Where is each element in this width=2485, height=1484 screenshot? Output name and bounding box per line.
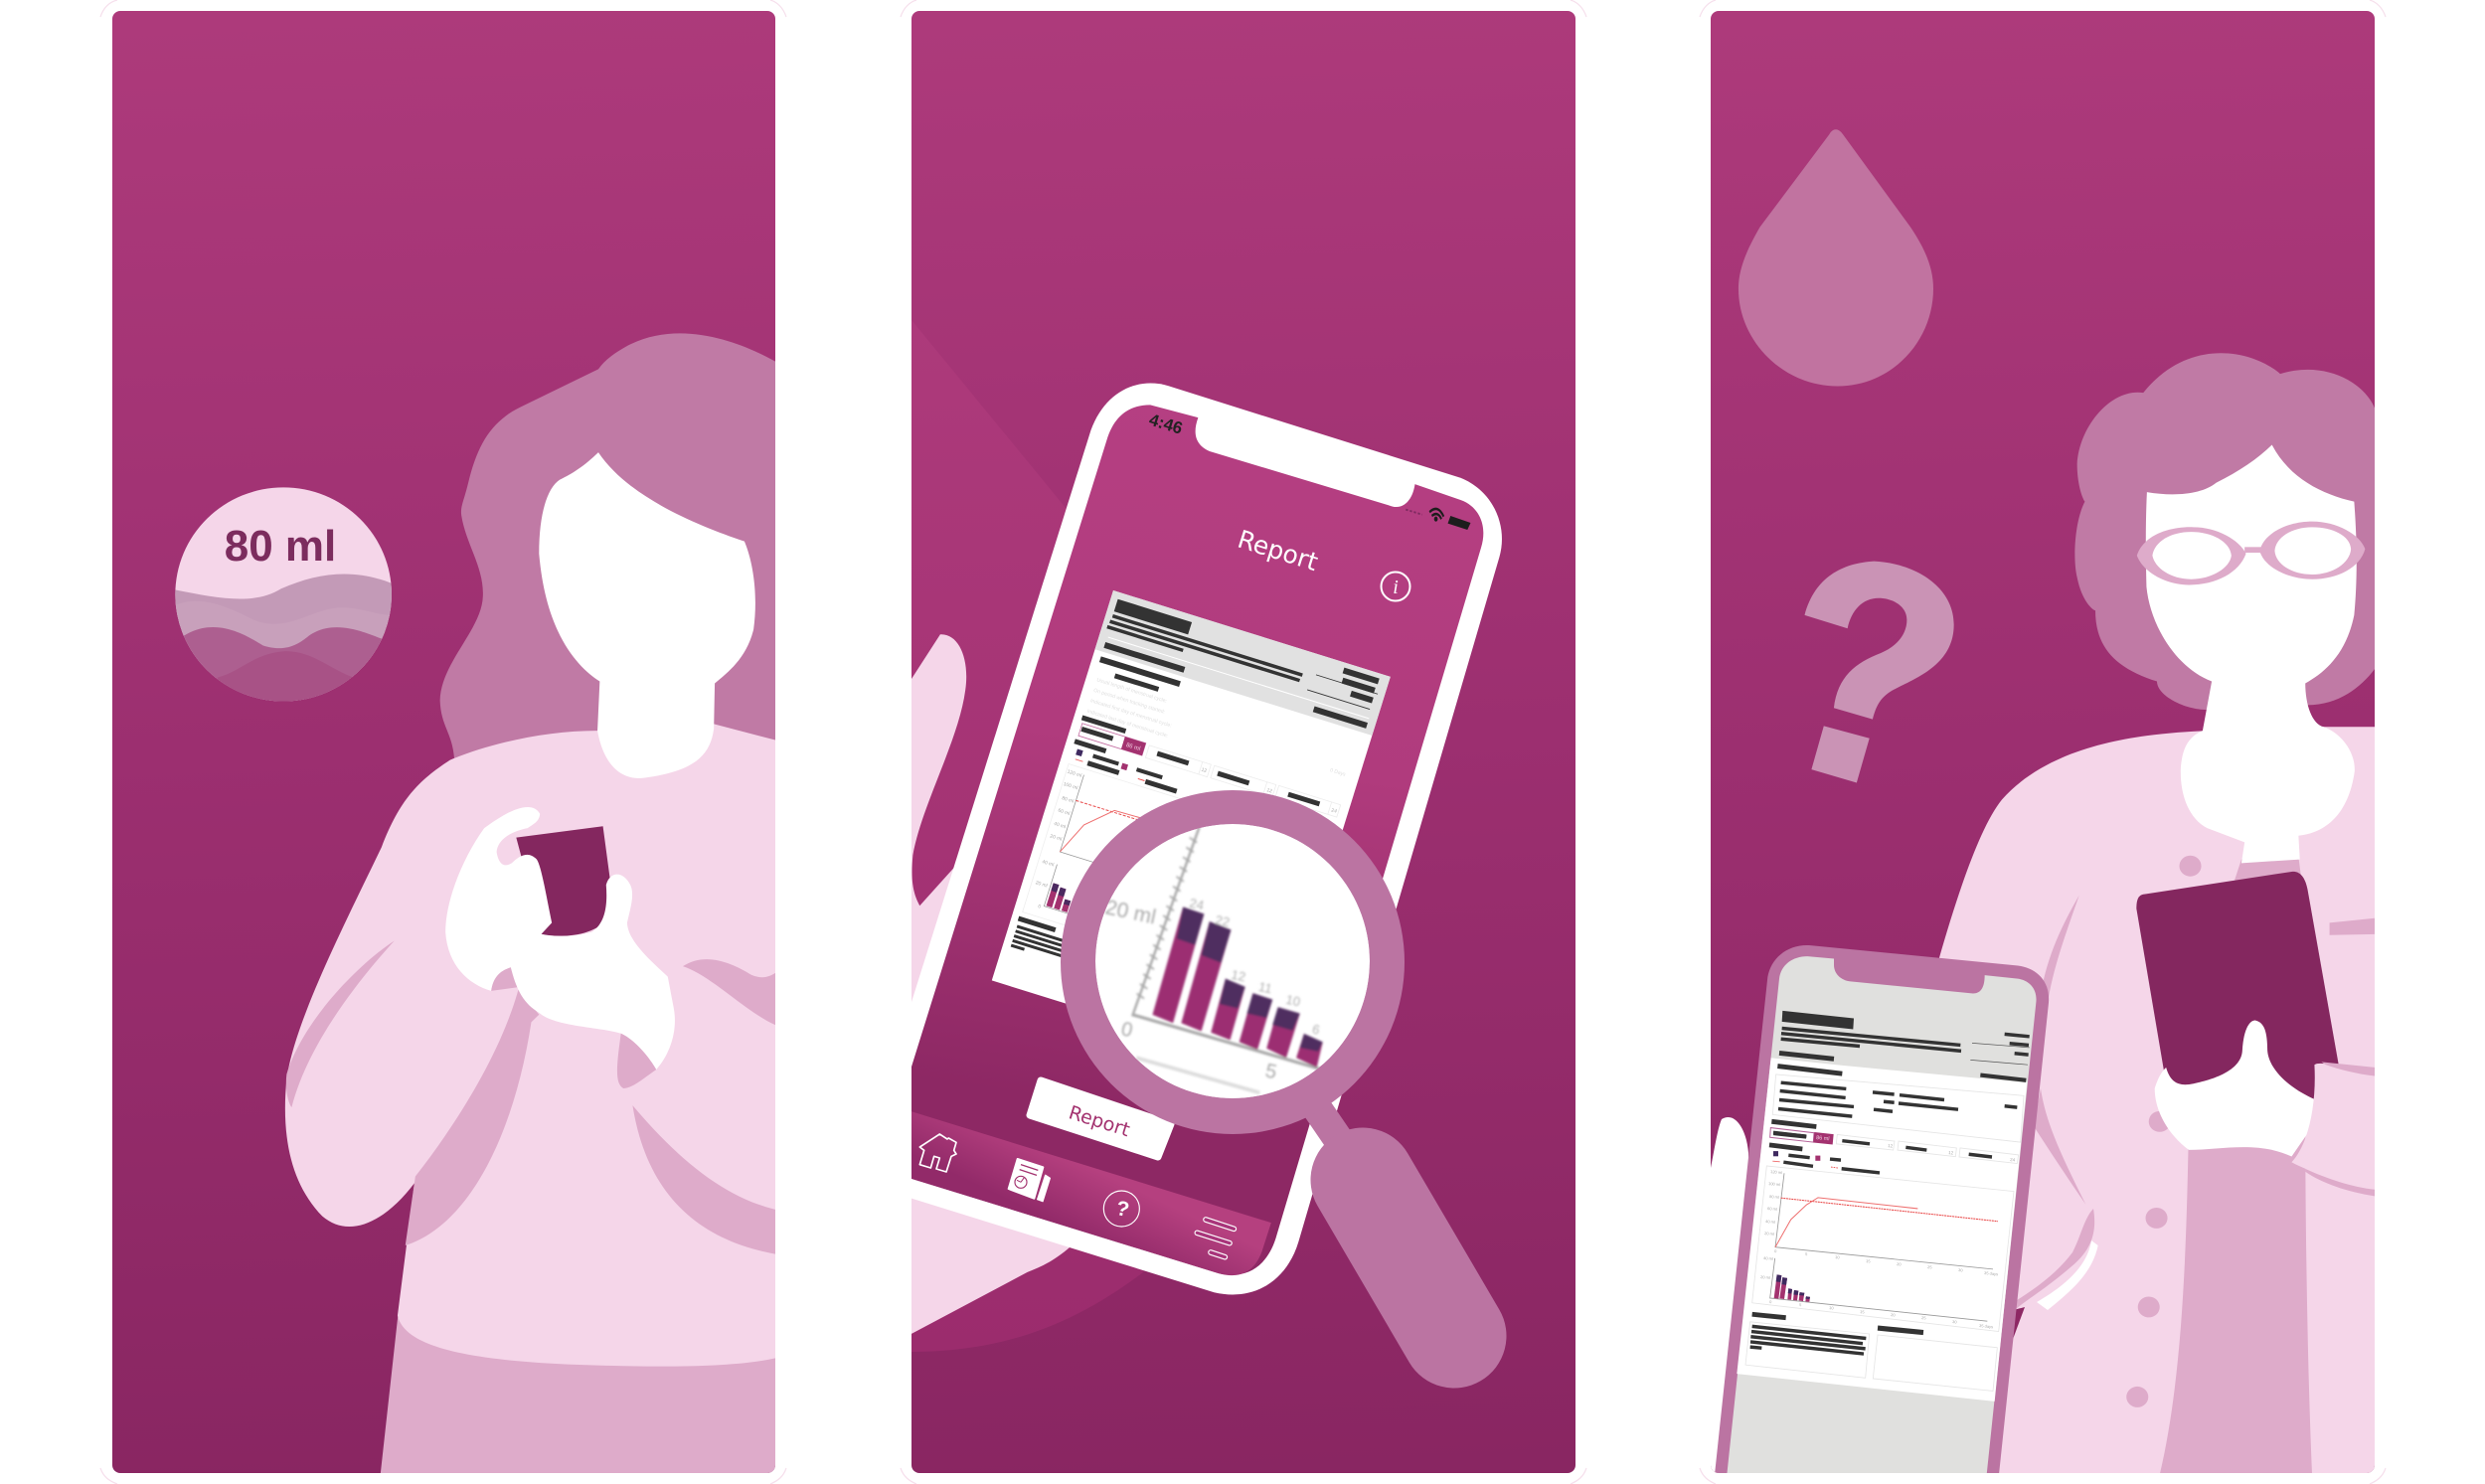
card values: 12: [1888, 1143, 1894, 1149]
tablet clipboard: [2136, 872, 2339, 1102]
bar chart axis: [1044, 865, 1277, 975]
summary card labels: [1156, 751, 1320, 807]
coat pocket: [2330, 918, 2376, 935]
glasses: [2137, 522, 2365, 584]
icon: blood drop: [1739, 129, 1933, 386]
line chart labels: 25: [1927, 1264, 1933, 1269]
panel background: [911, 11, 1575, 1473]
summary cards: [1145, 745, 1341, 817]
line chart labels: 80 ml: [1769, 1194, 1779, 1200]
palm below phone: [909, 1191, 1071, 1336]
zoomed bars: [1152, 907, 1323, 1068]
report document: [992, 590, 1391, 1004]
cumulative line chart: [1060, 775, 1305, 920]
lining sliver: [2037, 1240, 2098, 1310]
zoomed value labels: [1188, 896, 1321, 1038]
summary card values: 12: [1266, 787, 1273, 795]
menstrual cup: [516, 826, 612, 936]
cycle details list: [1086, 677, 1352, 793]
line chart labels: 100 ml: [1768, 1181, 1780, 1187]
bar chart label: 0: [1037, 904, 1042, 910]
zoomed axis labels: 0: [1119, 1018, 1134, 1042]
icon: help circle: [1103, 1191, 1139, 1227]
redacted title: [1782, 1011, 1854, 1030]
total volume badge: 86 ml: [1125, 742, 1141, 752]
line chart labels: 120 ml: [1067, 769, 1082, 779]
coat buttons: [2126, 856, 2202, 1407]
legend swatches: [1075, 748, 1148, 781]
bar chart labels: 10: [1829, 1305, 1835, 1310]
chart frame: [1023, 764, 1330, 993]
icon: question mark: [1805, 562, 1954, 782]
right sleeve shading: [683, 959, 775, 1025]
badge value: 86 ml: [1816, 1135, 1830, 1142]
bar chart labels: 25: [1921, 1315, 1927, 1320]
report button: Report: [1066, 1101, 1132, 1141]
bubble waves: [175, 575, 392, 702]
help icon mark: ?: [1114, 1197, 1131, 1222]
summary card values: 24: [1330, 807, 1338, 815]
bar chart labels: 20 ml: [1760, 1274, 1770, 1280]
hands: [445, 807, 675, 1070]
background gap beside hip: [2006, 1307, 2025, 1342]
hand on tablet: [2155, 1020, 2319, 1157]
second phone: [1715, 945, 2049, 1478]
magnifier lens: [1095, 824, 1370, 1098]
hand behind phone: [909, 634, 966, 1014]
cycle details list: Indicated first day of menstrual cycle:: [1089, 698, 1172, 729]
status time: 4:46: [1147, 411, 1185, 438]
panel: woman holding menstrual cup: [112, 11, 775, 1476]
bar chart labels: 35 days: [1979, 1323, 1993, 1329]
bar chart labels: 15: [1860, 1309, 1866, 1314]
icon: home: [919, 1134, 956, 1172]
line chart labels: [1764, 1169, 1998, 1276]
sweater: [285, 724, 775, 1367]
hair: [440, 333, 775, 766]
zoomed axis labels: 5: [1263, 1060, 1278, 1083]
summary card values: [1201, 767, 1338, 815]
report page: [1737, 1058, 2027, 1402]
shirt: [2159, 1117, 2312, 1476]
zoomed value labels: 24: [1188, 896, 1206, 912]
hand behind second phone: [1711, 1117, 1748, 1473]
volume bubble: [175, 487, 392, 702]
line chart labels: 35 days: [1984, 1270, 1998, 1276]
lower arm shading: [2034, 1088, 2085, 1205]
torso shading: [632, 1105, 775, 1254]
header rule lines: [1970, 1043, 2030, 1065]
coat: [1939, 727, 2376, 1476]
card values: [1888, 1143, 2016, 1163]
status bar icons: [1406, 509, 1470, 530]
volume label: 80 ml: [225, 522, 336, 571]
shadow under hand: [617, 1032, 656, 1088]
line chart labels: 20 ml: [1049, 833, 1063, 843]
right cuff: [2291, 1064, 2376, 1188]
line chart labels: 15: [1866, 1258, 1872, 1263]
bar chart labels: 0: [1769, 1299, 1772, 1304]
panel: phone with report and magnifier: [909, 11, 1575, 1473]
zoomed value labels: 11: [1257, 979, 1273, 996]
line chart labels: [1047, 769, 1082, 843]
icon: report: [1009, 1159, 1050, 1202]
legend swatches: [1772, 1151, 1838, 1168]
line chart labels: 60 ml: [1057, 808, 1071, 817]
zoomed bar chart: [1103, 827, 1323, 1092]
bar chart labels: 20: [1891, 1312, 1897, 1317]
zoomed value labels: 12: [1230, 967, 1247, 984]
icon: menu: [1197, 1220, 1234, 1257]
grey header lower strip: [1771, 1049, 2027, 1082]
line chart labels: 10: [1835, 1254, 1841, 1259]
zoomed value labels: 6: [1311, 1022, 1321, 1038]
bar chart labels: 40 ml: [1763, 1255, 1773, 1261]
notes redacted text: [1010, 916, 1124, 979]
info icon: i: [1393, 577, 1399, 598]
line chart labels: 20 ml: [1764, 1231, 1774, 1237]
magnifier handle: [1317, 1108, 1454, 1336]
line chart labels: 60 ml: [1767, 1206, 1777, 1212]
thin rules and boxes: [1745, 1074, 2024, 1391]
summary card values: 12: [1201, 767, 1208, 774]
cycle details list: On period when tracking started:: [1092, 688, 1166, 716]
upper arm shading: [2041, 896, 2079, 1004]
illustration: doctor: [1739, 129, 2376, 1476]
section redacted text: [1069, 656, 1209, 793]
bar chart labels: 5: [1799, 1302, 1802, 1307]
document header band: [1095, 590, 1391, 736]
line chart labels: 40 ml: [1765, 1219, 1775, 1225]
bar chart labels: 30: [1952, 1319, 1958, 1324]
bar chart label: 40 ml: [1041, 859, 1055, 869]
arm shading: [406, 989, 539, 1245]
magnifier ring: [1061, 790, 1405, 1134]
header redacted text: [1101, 596, 1383, 730]
bar chart label: 20 ml: [1035, 880, 1048, 890]
bar chart bars: [1047, 883, 1075, 912]
card values: 24: [2010, 1157, 2016, 1163]
face and neck: [539, 452, 755, 778]
phone screen: [1727, 956, 2037, 1478]
collar shirt: [2235, 857, 2302, 885]
line chart labels: 20: [1897, 1261, 1903, 1266]
line chart labels: 0: [1774, 1248, 1777, 1253]
redacted text lines: [1750, 1028, 2030, 1354]
face and neck: [2146, 445, 2357, 863]
panel background: [1711, 11, 2375, 1473]
report button: [1030, 1080, 1171, 1157]
hair: [2074, 353, 2376, 710]
line chart labels: 100 ml: [1063, 781, 1078, 791]
card values: 12: [1948, 1150, 1954, 1156]
phone group: [909, 384, 1502, 1336]
tab bar icons: [919, 1134, 1234, 1257]
bar chart labels: [1760, 1255, 1993, 1329]
sleeve shading: [286, 940, 395, 1107]
cycle details list: Usual length of menstrual cycle:: [1096, 677, 1168, 705]
bar chart label: [1028, 859, 1055, 910]
cuff shading: [2305, 1062, 2376, 1197]
hip shading: [2014, 1209, 2094, 1309]
phone body: [909, 384, 1502, 1294]
phone frame: [1715, 945, 2049, 1478]
zoomed axis labels: [1103, 896, 1278, 1083]
line chart: [1775, 1173, 1998, 1269]
line chart labels: 80 ml: [1061, 795, 1075, 805]
panel background: [112, 11, 775, 1473]
line chart labels: 30: [1958, 1267, 1964, 1272]
shadow under fingers: [491, 967, 519, 991]
zoomed value labels: 22: [1214, 912, 1232, 929]
screen title: Report: [1235, 525, 1322, 577]
cycle details list: Indicated last day of menstrual cycle:: [1086, 709, 1169, 740]
info icon: [1382, 573, 1409, 600]
panel: woman with glasses and phone: [1711, 11, 2376, 1478]
total badge: [1770, 1128, 1834, 1145]
pants: [380, 1311, 775, 1476]
line chart labels: 40 ml: [1053, 821, 1067, 830]
total volume badge: [1078, 724, 1146, 755]
bar chart: [1770, 1258, 1987, 1321]
zoomed axes: [1133, 827, 1321, 1092]
large background drop: [911, 497, 1143, 1352]
illustration: woman: [174, 333, 775, 1476]
phone screen: [909, 405, 1483, 1275]
zoomed axis labels: 20 ml: [1103, 896, 1158, 929]
line chart labels: 5: [1805, 1251, 1808, 1256]
line chart labels: 120 ml: [1770, 1169, 1782, 1175]
cycle details list: 0 Days: [1329, 767, 1347, 778]
zoomed value labels: 10: [1284, 992, 1302, 1009]
tab bar: [909, 1110, 1271, 1275]
